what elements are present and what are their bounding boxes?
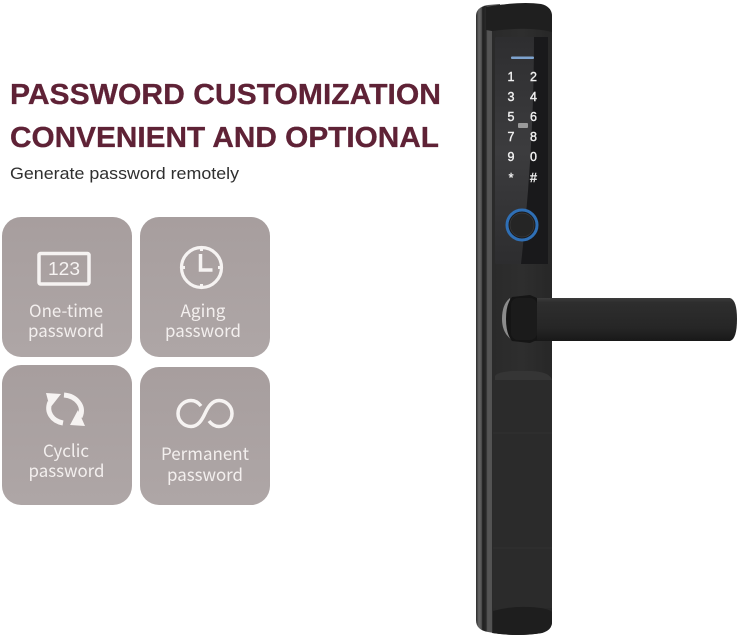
title: CONVENIENT AND OPTIONAL [10, 122, 439, 154]
panel: cyclic password [2, 365, 132, 505]
keypad digits: 1 [508, 70, 515, 84]
lower panel [493, 380, 552, 608]
label: permanent password [161, 440, 250, 486]
keypad digits: 3 [508, 90, 515, 104]
card reader mark [518, 123, 528, 128]
label: cyclic password: Cyclic [43, 437, 89, 462]
panel: aging password [140, 217, 270, 357]
label: aging password: password [165, 317, 241, 342]
top cap [486, 3, 552, 32]
keypad digits: # [530, 171, 537, 185]
keypad digits [508, 70, 537, 185]
bottom cap [493, 607, 552, 635]
keypad digits: 8 [530, 130, 537, 144]
icon: 123 display: 123 [48, 259, 80, 279]
label: permanent password: Permanent [161, 440, 250, 465]
keypad digits: 5 [508, 110, 515, 124]
subtitle: Generate password remotely [10, 165, 240, 183]
label: one-time password: password [28, 317, 104, 342]
icon: cycle arrows [46, 393, 85, 426]
smart door lock product [476, 3, 737, 635]
keypad digits: 4 [530, 90, 537, 104]
lower cover [495, 371, 552, 380]
keypad digits: 2 [530, 70, 537, 84]
label: aging password [165, 297, 241, 342]
icon: infinity loop [178, 400, 232, 426]
keypad digits: 0 [530, 150, 537, 164]
label: cyclic password: password [28, 457, 104, 482]
lever handle [502, 295, 737, 343]
keypad digits: * [509, 171, 514, 185]
label: aging password: Aging [180, 297, 226, 322]
panel: permanent password [140, 367, 270, 505]
title: PASSWORD CUSTOMIZATION [10, 79, 441, 111]
icon: clock [181, 247, 222, 288]
title [10, 79, 441, 154]
label: permanent password: password [167, 461, 243, 486]
keypad digits: 6 [530, 110, 537, 124]
panel: one-time password [2, 217, 132, 357]
label: cyclic password [28, 437, 104, 482]
fingerprint sensor [507, 210, 537, 240]
indicator light [511, 56, 534, 59]
keypad panel [495, 37, 548, 264]
label: one-time password [28, 297, 104, 342]
keypad digits: 7 [508, 130, 515, 144]
lock body [492, 4, 552, 635]
label: one-time password: One-time [29, 297, 103, 322]
lock side edge [476, 4, 500, 634]
keypad digits: 9 [508, 150, 515, 164]
